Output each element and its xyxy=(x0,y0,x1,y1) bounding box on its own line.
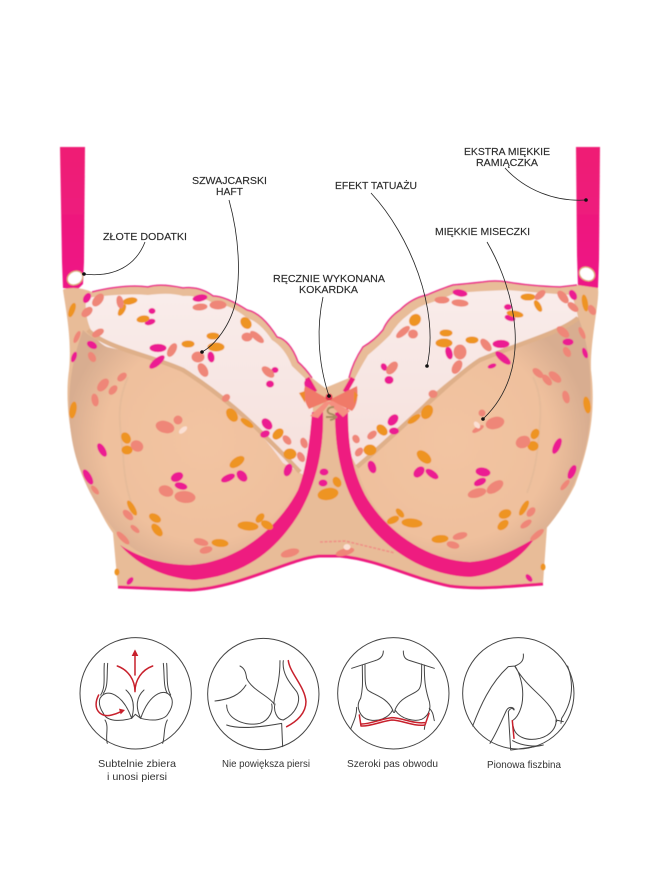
label: szwajcarski haft xyxy=(192,175,267,198)
embroidery: pale highlights xyxy=(178,420,481,550)
center bridge stitching xyxy=(320,541,395,553)
leader: ekstra miekkie ramiaczka xyxy=(505,168,588,202)
icon caption: nie powieksza piersi: Nie powiększa piersi xyxy=(222,758,310,770)
left sheer mesh xyxy=(86,294,313,477)
bra photo xyxy=(60,147,600,590)
icon caption: subtelnie zbiera: Subtelnie zbiera xyxy=(98,758,176,770)
scalloped top edge xyxy=(92,281,577,378)
leader: miekkie miseczki xyxy=(481,242,515,421)
right gold ring xyxy=(577,264,597,284)
label: efekt tatuazu: EFEKT TATUAŻU xyxy=(335,179,417,192)
icon caption: subtelnie zbiera xyxy=(98,758,176,783)
right wire channel xyxy=(335,408,535,577)
icon caption: subtelnie zbiera: i unosi piersi xyxy=(107,771,167,783)
neckline piping xyxy=(307,378,353,392)
icon: does not enlarge xyxy=(208,638,319,750)
label: miekkie miseczki: MIĘKKIE MISECZKI xyxy=(435,226,530,238)
icon: subtle lift xyxy=(80,638,191,749)
left strap xyxy=(60,147,85,290)
bottom band hem xyxy=(118,556,543,590)
leader: zlote dodatki xyxy=(82,242,145,276)
label: recznie wykonana kokardka: RĘCZNIE WYKONANA xyxy=(273,273,385,285)
embroidery: pink xyxy=(70,289,589,585)
label: ekstra miekkie ramiaczka: EKSTRA MIĘKKIE xyxy=(464,146,550,158)
left cup shading xyxy=(69,330,307,567)
cup seams xyxy=(88,318,578,502)
icon: vertical boning xyxy=(463,638,574,750)
left wire channel xyxy=(120,412,323,580)
leader: efekt tatuazu xyxy=(371,193,430,368)
gold charm xyxy=(326,407,337,420)
label: szwajcarski haft: HAFT xyxy=(216,186,244,198)
bra body xyxy=(63,281,598,590)
callouts xyxy=(82,146,588,421)
right sheer mesh xyxy=(338,290,578,467)
embroidery: salmon xyxy=(73,289,597,559)
icon caption: pionowa fiszbina: Pionowa fiszbina xyxy=(487,759,561,771)
right cup shading xyxy=(357,317,591,565)
label: recznie wykonana kokardka: KOKARDKA xyxy=(299,284,358,296)
embroidery: orange xyxy=(67,294,591,575)
left gold ring xyxy=(65,268,85,288)
right strap xyxy=(576,147,600,288)
label: recznie wykonana kokardka xyxy=(273,273,385,296)
label: szwajcarski haft: SZWAJCARSKI xyxy=(192,175,267,187)
icon: wide band xyxy=(338,638,449,749)
leader: kokardka xyxy=(319,297,331,398)
bow xyxy=(299,386,358,418)
leader: szwajcarski haft xyxy=(200,200,238,354)
label: ekstra miekkie ramiaczka xyxy=(464,146,550,169)
icon caption: szeroki pas obwodu: Szeroki pas obwodu xyxy=(347,758,438,770)
label: zlote dodatki: ZŁOTE DODATKI xyxy=(103,231,187,243)
label: ekstra miekkie ramiaczka: RAMIĄCZKA xyxy=(476,157,538,169)
